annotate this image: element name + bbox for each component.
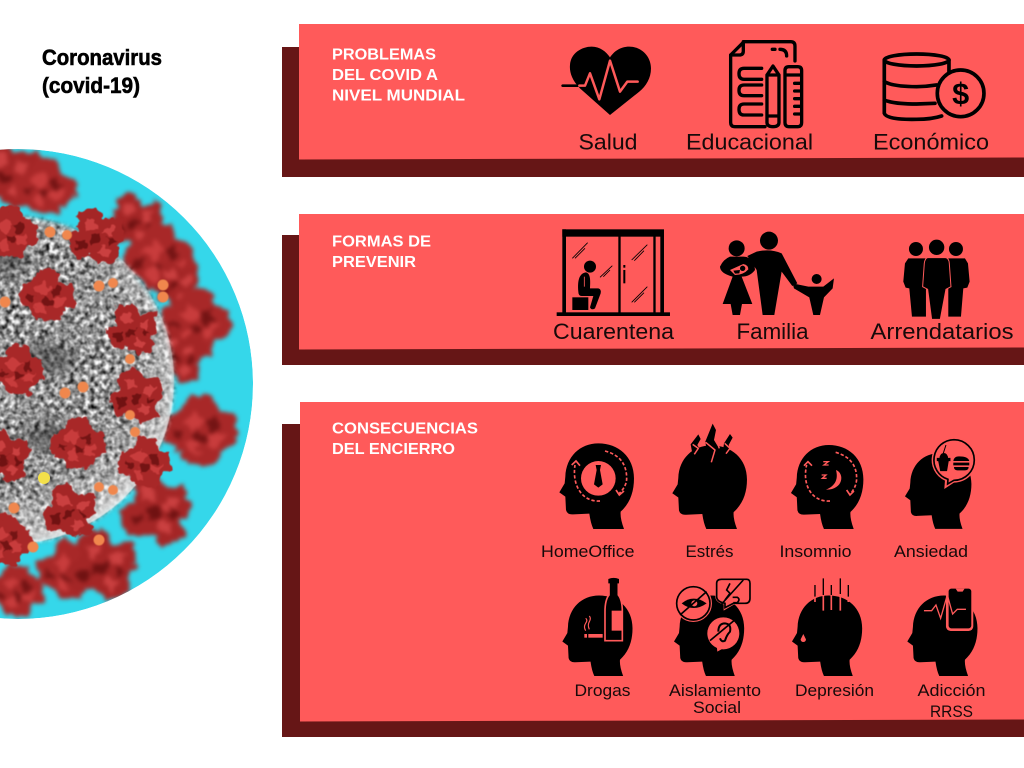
label: salud: Salud xyxy=(578,130,638,154)
panel shadow xyxy=(282,47,1024,177)
icon: group of people xyxy=(903,240,970,319)
heading: problemas: NIVEL MUNDIAL xyxy=(332,88,465,104)
label: aislamiento social: Aislamiento xyxy=(669,681,761,700)
label: depresion: Depresión xyxy=(795,681,874,700)
label: insomnio: Insomnio xyxy=(780,542,852,561)
heading: consecuencias xyxy=(332,420,478,458)
orange dots xyxy=(0,226,168,552)
icon: home office head xyxy=(559,443,634,529)
heading: prevenir: PREVENIR xyxy=(332,254,416,271)
icon: document with pencil and ruler xyxy=(731,42,802,127)
panel shadow xyxy=(282,235,1024,365)
panel: prevenir xyxy=(282,214,1024,365)
label: arrendatarios: Arrendatarios xyxy=(870,319,1014,344)
icon: family xyxy=(720,232,834,315)
heading: problemas: DEL COVID A xyxy=(332,67,438,84)
icon: social isolation head xyxy=(674,579,750,676)
virus illustration xyxy=(0,144,253,619)
cyan disc xyxy=(0,149,253,619)
label: familia: Familia xyxy=(736,319,809,344)
label: drogas: Drogas xyxy=(574,681,630,700)
heading: consecuencias: CONSECUENCIAS xyxy=(332,420,478,438)
icon: anxiety head xyxy=(905,437,977,529)
panel: consecuencias xyxy=(282,402,1024,737)
panel face xyxy=(299,24,1024,160)
inner spikes xyxy=(0,208,169,563)
icon: social media addiction head xyxy=(907,586,977,676)
panel: problemas xyxy=(282,24,1024,177)
label: estres: Estrés xyxy=(686,542,734,561)
icon: insomnia head xyxy=(791,445,863,529)
title: Coronavirus xyxy=(42,45,162,70)
label: adiccion rrss: Adicción xyxy=(918,681,986,700)
heading: prevenir: FORMAS DE xyxy=(332,234,431,250)
heading: prevenir xyxy=(332,234,431,271)
label: aislamiento social xyxy=(669,681,761,717)
label: adiccion rrss: RRSS xyxy=(930,702,973,721)
icon: person in quarantine xyxy=(557,229,670,316)
dark shade patches xyxy=(0,248,78,449)
grey virus body xyxy=(0,216,174,544)
label: cuarentena: Cuarentena xyxy=(553,319,674,344)
label: economico: Económico xyxy=(873,130,989,154)
label: educacional: Educacional xyxy=(686,130,813,154)
heading: problemas xyxy=(332,46,465,104)
icon: heart xyxy=(563,47,651,115)
title: (covid-19) xyxy=(42,73,140,98)
label: home office: HomeOffice xyxy=(541,542,634,561)
icon: coin database xyxy=(884,54,984,119)
title xyxy=(42,45,162,98)
icon: depression head xyxy=(792,578,862,676)
yellow dot xyxy=(38,472,50,484)
label: adiccion rrss xyxy=(918,681,986,721)
outer spikes xyxy=(0,144,234,613)
panel face xyxy=(299,214,1024,350)
panel shadow xyxy=(282,424,1024,737)
label: aislamiento social: Social xyxy=(693,698,741,717)
icon: coin database: $ xyxy=(952,77,969,111)
icon: stress head xyxy=(672,424,747,529)
icon: drugs head xyxy=(562,578,633,676)
panel face xyxy=(300,402,1024,722)
heading: consecuencias: DEL ENCIERRO xyxy=(332,441,455,458)
heading: problemas: PROBLEMAS xyxy=(332,46,436,64)
label: ansiedad: Ansiedad xyxy=(894,542,968,561)
